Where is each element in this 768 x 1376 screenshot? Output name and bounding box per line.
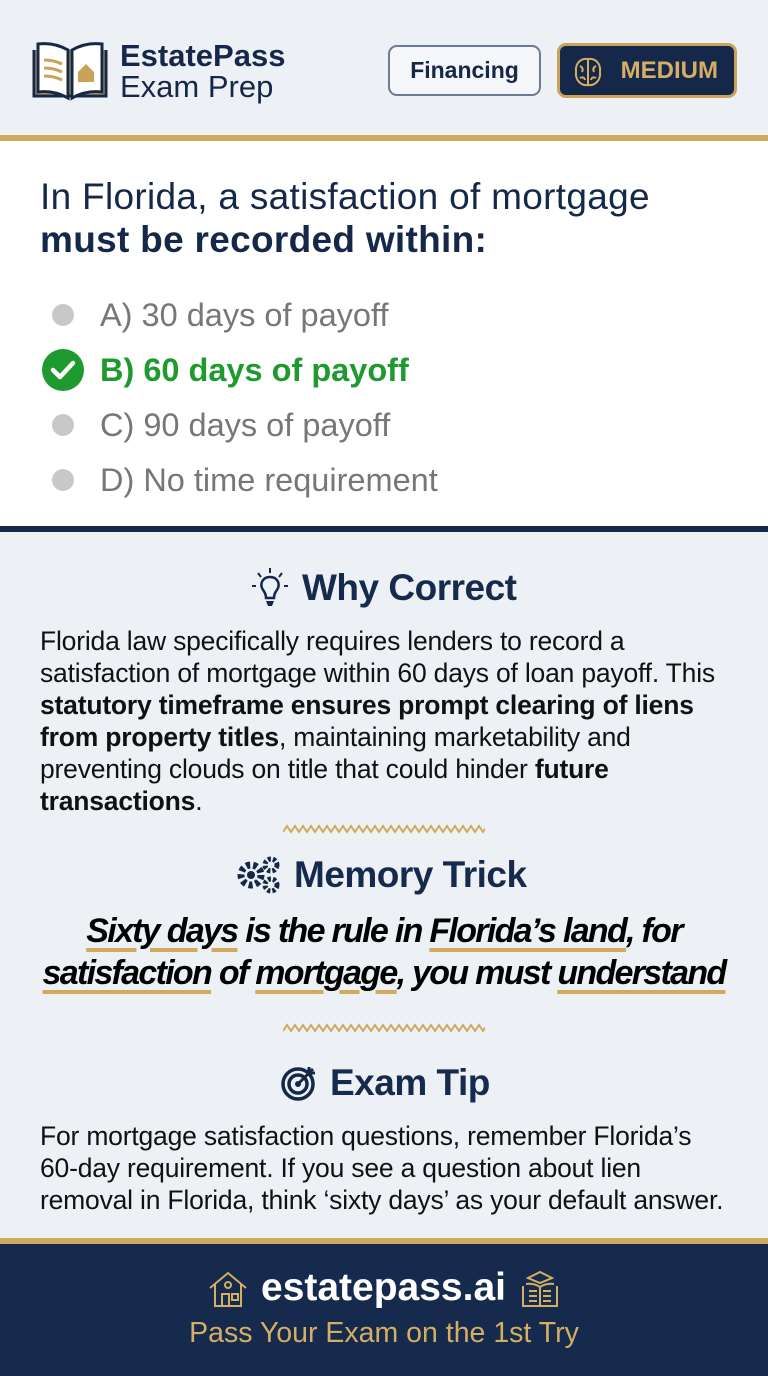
text: why correct: Florida law specifically requires lenders to record a xyxy=(40,626,624,656)
option A: A) 30 days of payoff xyxy=(100,296,388,332)
brand text xyxy=(120,38,285,104)
question panel xyxy=(0,141,768,526)
icon: house xyxy=(209,1272,247,1307)
badge: Financing: Financing xyxy=(410,57,519,83)
heading: Exam Tip: Exam Tip xyxy=(330,1062,490,1103)
footer xyxy=(0,1244,768,1376)
badge: Financing xyxy=(388,45,541,96)
badge: MEDIUM xyxy=(557,43,737,98)
icon: book with cap xyxy=(522,1270,558,1307)
option B correct: B) 60 days of payoff xyxy=(100,352,409,388)
text: why correct: satisfaction of mortgage within 60 days of loan payoff. This xyxy=(40,658,715,688)
header xyxy=(0,0,768,135)
icon: logo book xyxy=(32,42,108,101)
question text xyxy=(40,176,650,260)
footer brand: estatepass.ai xyxy=(261,1266,506,1309)
tagline: Pass Your Exam on the 1st Try xyxy=(189,1317,579,1349)
text: exam tip: 60-day requirement. If you see a question about lien xyxy=(40,1153,641,1183)
badge: MEDIUM: MEDIUM xyxy=(621,56,718,84)
text: exam tip xyxy=(40,1121,723,1215)
option D: D) No time requirement xyxy=(100,462,438,498)
text: why correct: from property titles, maintaining marketability and xyxy=(40,722,631,752)
text: why correct: statutory timeframe ensures prompt clearing of liens xyxy=(40,690,694,720)
question text: must be recorded within: xyxy=(40,219,487,260)
heading: Memory Trick: Memory Trick xyxy=(294,854,527,895)
option C: C) 90 days of payoff xyxy=(100,406,390,442)
memory rhyme: Sixty days is the rule in Florida’s land, for xyxy=(86,912,682,950)
text: why correct xyxy=(40,626,715,816)
question text: In Florida, a satisfaction of mortgage xyxy=(40,176,650,217)
memory rhyme xyxy=(42,912,728,994)
text: why correct: transactions. xyxy=(40,786,202,816)
heading: Why Correct: Why Correct xyxy=(302,567,516,608)
text: why correct: preventing clouds on title that could hinder future xyxy=(40,754,609,784)
memory rhyme: satisfaction of mortgage, you must understand xyxy=(43,954,725,992)
brand text: EstatePass xyxy=(120,38,285,73)
text: exam tip: For mortgage satisfaction questions, remember Florida’s xyxy=(40,1121,691,1151)
brand text: Exam Prep xyxy=(120,69,273,104)
icon: brain xyxy=(574,58,602,86)
text: exam tip: removal in Florida, think ‘sixty days’ as your default answer. xyxy=(40,1185,723,1215)
